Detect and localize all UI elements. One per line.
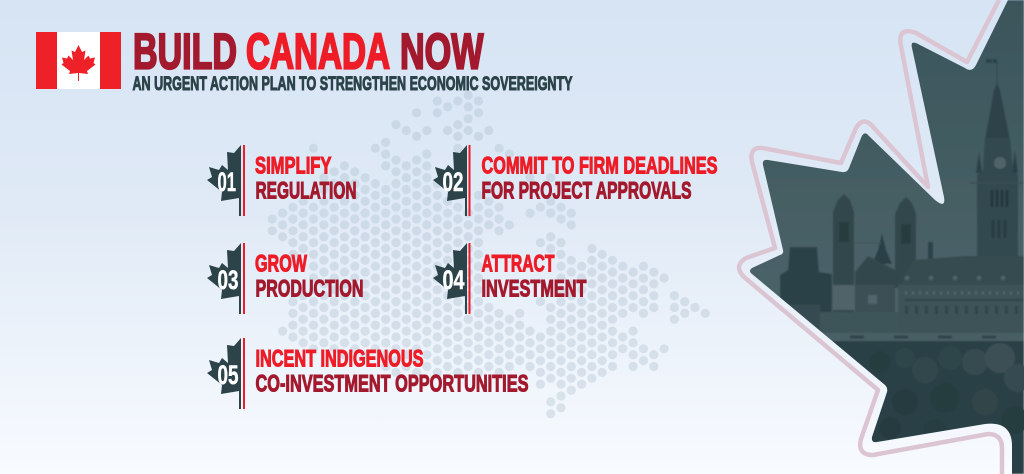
text: simplify regulation: REGULATION xyxy=(256,178,356,204)
text: incent indigenous co-investment xyxy=(256,346,528,398)
text: simplify regulation: SIMPLIFY xyxy=(255,152,332,180)
item 02 xyxy=(433,145,718,216)
main parliament building xyxy=(780,256,1024,341)
icon: half maple leaf 01: 01 xyxy=(218,167,236,197)
text: grow production xyxy=(255,250,364,302)
text: grow production: PRODUCTION xyxy=(256,276,364,302)
west towers and centre block xyxy=(780,194,933,313)
icon: half maple leaf 04 xyxy=(433,243,470,314)
text: incent indigenous co-investment: INCENT INDIGENOUS xyxy=(256,346,424,372)
icon: half maple leaf 05 xyxy=(207,338,245,409)
item 04 xyxy=(433,243,587,314)
text: commit to firm deadlines: COMMIT TO FIRM DEADLINES xyxy=(482,152,718,180)
title xyxy=(133,24,484,80)
photo in maple leaf: Parliament Hill xyxy=(740,0,1024,474)
item 03 xyxy=(207,243,364,314)
title: BUILD xyxy=(133,24,237,80)
icon: half maple leaf 02: 02 xyxy=(442,167,464,197)
icon: half maple leaf 03 xyxy=(207,243,245,314)
flag of Canada xyxy=(36,32,121,89)
icon: half maple leaf 01 xyxy=(207,145,245,216)
text: grow production: GROW xyxy=(255,250,307,278)
Peace Tower xyxy=(976,58,1019,256)
text: attract investment: ATTRACT xyxy=(482,250,555,278)
dotted map of Canada xyxy=(272,95,705,414)
subtitle: AN URGENT ACTION PLAN TO STRENGTHEN ECONOMIC SOVEREIGNTY xyxy=(132,73,572,95)
text: incent indigenous co-investment: CO-INVESTMENT OPPORTUNITIES xyxy=(256,370,528,398)
icon: half maple leaf 02 xyxy=(433,145,470,216)
text: attract investment: INVESTMENT xyxy=(482,276,587,302)
text: simplify regulation xyxy=(255,152,356,204)
item 01 xyxy=(207,145,356,216)
title: NOW xyxy=(400,24,484,80)
text: commit to firm deadlines: FOR PROJECT APPROVALS xyxy=(482,178,692,204)
item 05 xyxy=(207,338,528,409)
title: CANADA xyxy=(246,24,390,80)
icon: half maple leaf 03: 03 xyxy=(218,265,238,295)
icon: half maple leaf 04: 04 xyxy=(442,265,464,295)
text: commit to firm deadlines xyxy=(482,152,718,204)
maple leaf outline xyxy=(739,0,1002,474)
text: attract investment xyxy=(482,250,587,302)
icon: half maple leaf 05: 05 xyxy=(218,360,238,390)
trees xyxy=(832,340,1024,474)
